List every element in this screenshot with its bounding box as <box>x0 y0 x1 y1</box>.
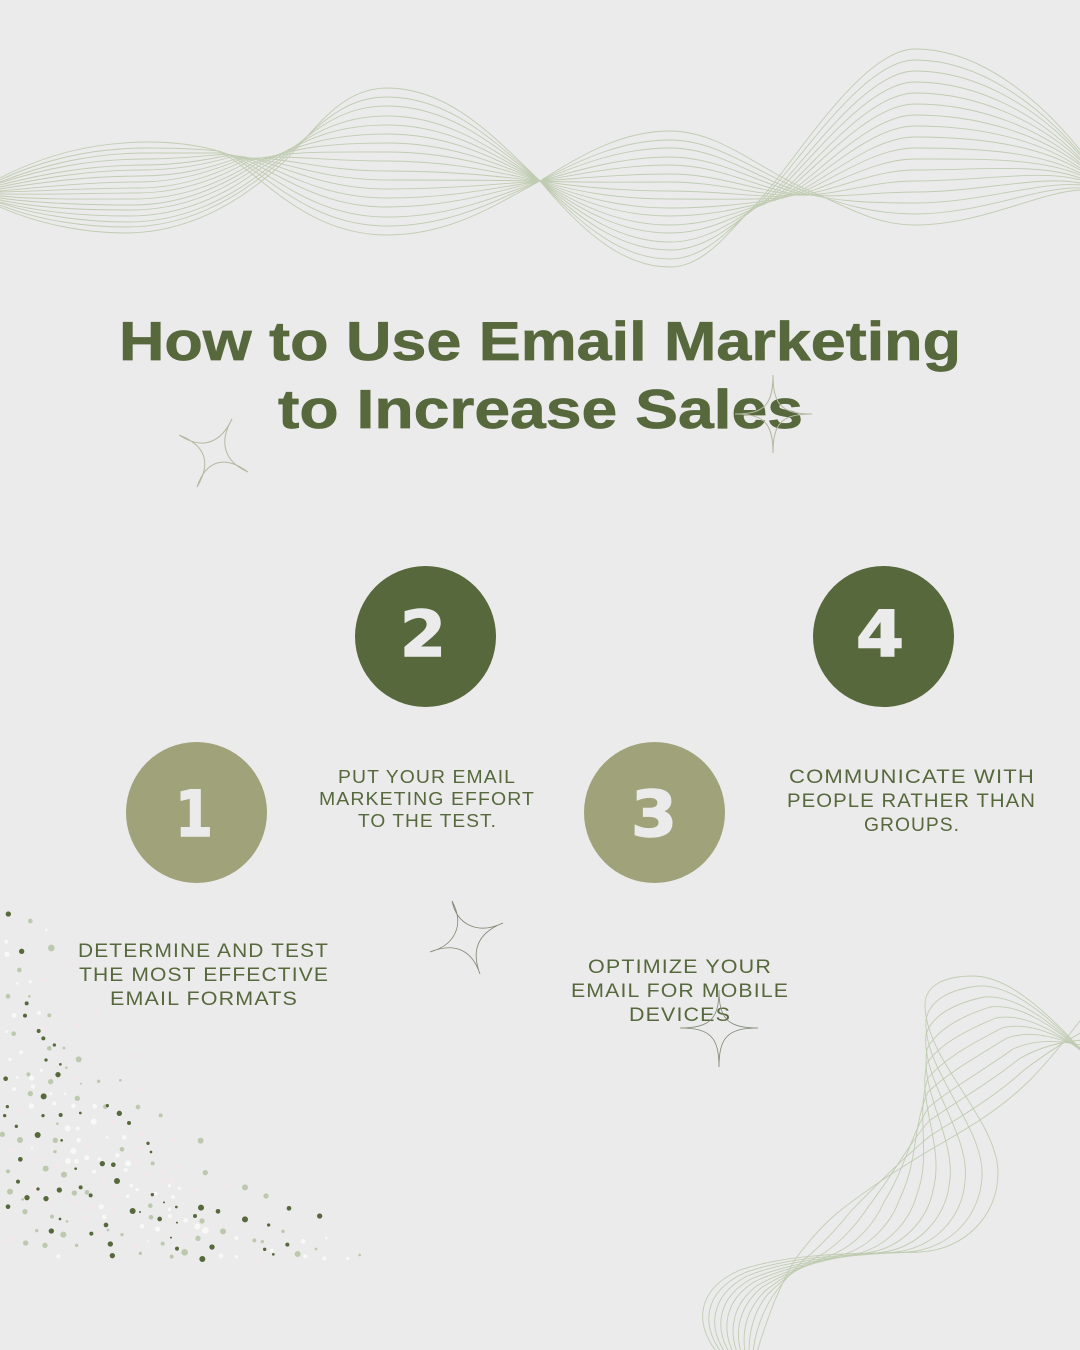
step 1 text: EMAIL FORMATS <box>110 989 298 1010</box>
step 2 badge: 2 <box>400 598 446 671</box>
top wave: right section <box>540 49 1080 267</box>
step 1 text: THE MOST EFFECTIVE <box>79 965 329 986</box>
step 3 text: OPTIMIZE YOUR <box>588 957 772 978</box>
step 3 badge: 3 <box>631 778 677 851</box>
step 4 badge: 4 <box>856 598 904 671</box>
confetti dots: bottom left <box>0 911 361 1265</box>
step 4 text: PEOPLE RATHER THAN <box>787 791 1036 812</box>
bottom-right wave <box>703 976 1080 1350</box>
step 1 badge <box>126 742 267 883</box>
step 1 badge: 1 <box>175 778 213 851</box>
step 1 text <box>78 941 329 1010</box>
step 3 text: DEVICES <box>629 1005 731 1026</box>
step 2 text: PUT YOUR EMAIL <box>338 767 516 787</box>
step 2 badge <box>355 566 496 707</box>
step 3 text <box>571 957 789 1026</box>
step 3 text: EMAIL FOR MOBILE <box>571 981 789 1002</box>
top wave: left section <box>0 88 540 235</box>
step 4 text <box>787 767 1036 836</box>
step 3 badge <box>584 742 725 883</box>
title: to Increase Sales <box>278 378 803 440</box>
step 2 text: TO THE TEST. <box>358 811 497 831</box>
step 4 badge <box>813 566 954 707</box>
step 1 text: DETERMINE AND TEST <box>78 941 329 962</box>
icon: sparkle over title <box>735 375 812 453</box>
icon: sparkle between steps <box>430 901 503 974</box>
icon: sparkle near title left <box>179 419 248 487</box>
step 2 text: MARKETING EFFORT <box>319 789 535 809</box>
step 4 text: GROUPS. <box>864 815 960 836</box>
step 2 text <box>319 767 535 831</box>
title <box>119 310 961 440</box>
icon: sparkle over step 3 text <box>680 990 758 1067</box>
step 4 text: COMMUNICATE WITH <box>789 767 1035 788</box>
title: How to Use Email Marketing <box>119 310 961 372</box>
